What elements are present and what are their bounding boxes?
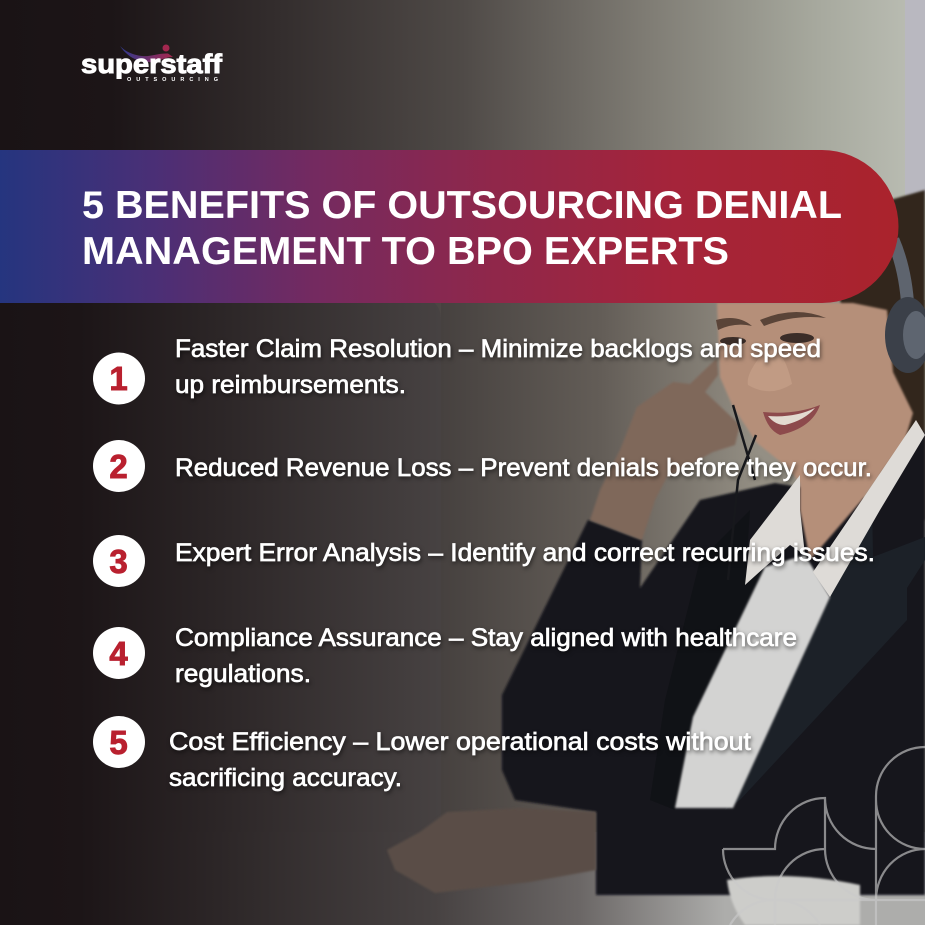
mouth [763, 405, 820, 435]
neck and face [717, 303, 913, 560]
benefit 5: 5 [109, 724, 128, 761]
benefit 4: 4 [109, 635, 128, 672]
headset [728, 240, 925, 580]
logo wordmark: superstaff [81, 49, 223, 79]
wall behind agent [441, 300, 925, 860]
logo: Superstaff Outsourcing: OUTSOURCING [127, 77, 218, 83]
left lapel [650, 510, 765, 810]
shirt collars [745, 420, 925, 597]
benefit 5: Cost Efficiency – Lower operational costs without [169, 728, 751, 756]
right lapel [725, 500, 925, 810]
benefit 4: Compliance Assurance – Stay aligned with healthcare [175, 624, 797, 652]
benefit 4: regulations. [175, 660, 311, 688]
typing hand [387, 808, 596, 893]
benefit 5 [93, 716, 751, 792]
logo swoosh [120, 46, 173, 62]
benefit 5: sacrificing accuracy. [169, 764, 402, 792]
window strip [905, 0, 925, 195]
benefit 4 [93, 624, 797, 688]
hair [840, 190, 925, 520]
raised hand and forearm [590, 358, 740, 540]
benefit 2 [93, 440, 872, 492]
jacket, sleeve and torso [502, 430, 925, 895]
nose highlight [748, 345, 792, 391]
benefit 2: Reduced Revenue Loss – Prevent denials before they occur. [175, 454, 872, 482]
benefit 2: 2 [109, 448, 128, 485]
white cup [727, 876, 860, 925]
desk surface [0, 832, 925, 925]
title banner [0, 150, 898, 303]
benefit 1: up reimbursements. [175, 371, 406, 399]
logo: Superstaff Outsourcing [81, 44, 223, 83]
benefit 3: 3 [109, 543, 128, 580]
benefit 3 [93, 535, 875, 587]
title: MANAGEMENT TO BPO EXPERTS [82, 230, 729, 273]
benefit 3: Expert Error Analysis – Identify and correct recurring issues. [175, 539, 875, 567]
title: 5 BENEFITS OF OUTSOURCING DENIAL [82, 184, 842, 227]
decorative line art [723, 747, 925, 925]
benefit 1: Faster Claim Resolution – Minimize backlogs and speed [175, 335, 821, 363]
white shirt [675, 555, 830, 808]
brows and eyes [716, 312, 826, 330]
monitor [0, 300, 441, 835]
benefit 1: 1 [109, 360, 128, 397]
benefit 1 [93, 335, 821, 404]
